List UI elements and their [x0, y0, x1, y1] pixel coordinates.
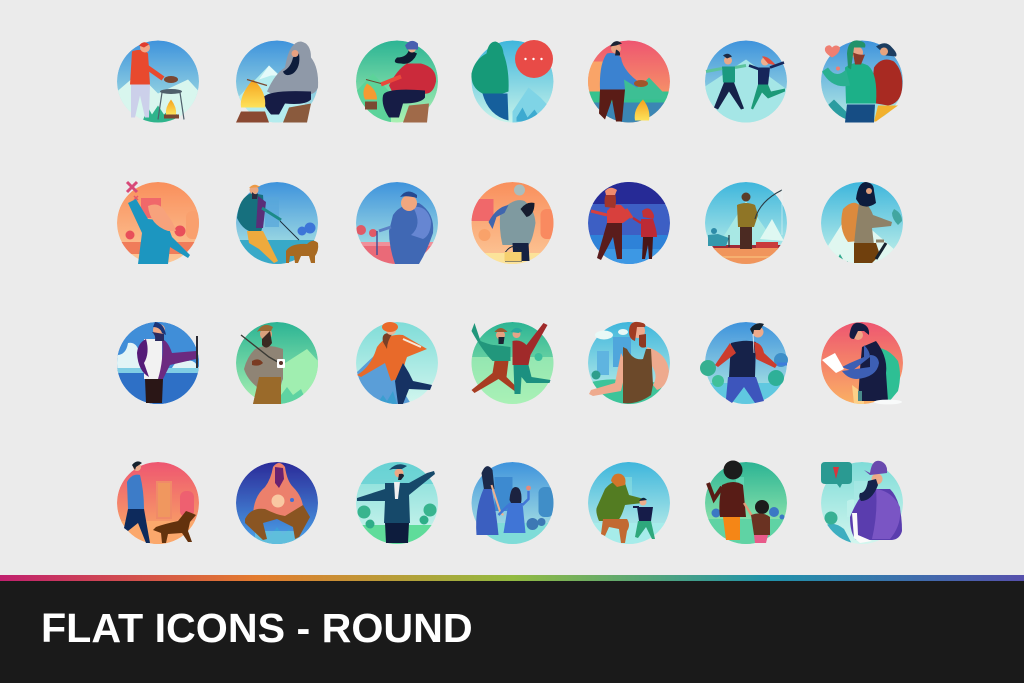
figure: small fisher — [708, 228, 729, 247]
background scene — [472, 182, 554, 265]
figure — [599, 41, 649, 122]
footer bar — [0, 581, 1024, 683]
background scene — [588, 40, 670, 122]
background scene — [705, 462, 787, 544]
icon: man walking dog at sunset — [117, 461, 199, 544]
trees — [358, 504, 436, 528]
icon: two friends dancing — [472, 322, 554, 404]
figure — [357, 464, 435, 543]
dog — [286, 241, 318, 263]
background scene — [705, 322, 787, 404]
heart bubbles — [825, 45, 840, 70]
figure — [363, 41, 436, 122]
figure — [245, 463, 310, 540]
figure — [471, 42, 509, 120]
figure: woman — [749, 56, 785, 110]
icon: man in grey hoodie by campfire — [236, 40, 318, 122]
icon: man in brown coat with mug — [236, 322, 318, 404]
background scene — [821, 462, 903, 544]
icon: old man with cane — [356, 182, 438, 264]
figure: girl — [498, 486, 531, 533]
figure: woman — [873, 43, 902, 121]
background scene — [236, 322, 318, 404]
figure: right friend — [510, 323, 550, 394]
figure: man — [706, 54, 746, 110]
figure — [589, 322, 669, 403]
icon: person in orange coat skating — [356, 322, 438, 404]
figure — [488, 184, 536, 261]
figure: child — [633, 208, 657, 259]
trees — [700, 353, 788, 387]
icon: bearded man in red coat by campfire — [356, 40, 438, 123]
figure — [124, 461, 150, 543]
figure — [377, 191, 433, 264]
icon: squatting man with long beard — [236, 462, 318, 544]
figure — [128, 199, 190, 264]
cross mark — [127, 182, 138, 200]
background scene — [356, 462, 438, 544]
figure — [850, 461, 902, 543]
speech bubble — [515, 40, 553, 78]
background scene — [588, 182, 670, 264]
icon: man and child holding hands — [588, 182, 670, 264]
background scene — [472, 40, 554, 122]
figure: main fisherman — [737, 190, 782, 249]
icon: person in green hoodie with speech bubble — [471, 40, 554, 122]
figure: adult — [708, 460, 754, 540]
bush — [526, 518, 546, 530]
background scene — [821, 322, 903, 404]
title: FLAT ICONS - ROUND — [41, 605, 473, 651]
figure — [357, 322, 432, 404]
icon: couple in warm clothes with heart — [821, 40, 903, 122]
background scene — [472, 322, 554, 404]
figure: man — [591, 188, 632, 260]
icon: bearded man in tank top — [588, 322, 670, 404]
rainbow stripe — [0, 575, 1024, 581]
figure: woman — [596, 474, 644, 543]
background scene — [117, 462, 199, 544]
icon: woman playing with child — [588, 462, 670, 544]
figure: woman — [476, 466, 504, 535]
icon: man in purple jacket at railing — [117, 322, 199, 404]
clouds — [595, 329, 628, 340]
background scene — [821, 182, 903, 264]
background scene — [236, 40, 318, 122]
icon: man in suit gesturing — [356, 462, 438, 544]
figure — [236, 42, 318, 122]
icon: dancing couple — [705, 40, 787, 122]
background scene — [588, 462, 670, 544]
figure — [137, 322, 198, 403]
background scene — [705, 40, 787, 122]
icon: man grilling — [117, 40, 199, 122]
icon: fisherman on boat — [705, 182, 787, 264]
figure: left friend — [472, 323, 520, 394]
figure — [715, 323, 787, 403]
background scene — [588, 322, 670, 404]
figure — [130, 42, 184, 120]
background scene — [117, 182, 200, 264]
figure: child — [751, 500, 770, 543]
background scene — [356, 322, 438, 404]
background scene — [356, 182, 438, 264]
figure — [822, 323, 902, 404]
icon: blue figure waving with crossed mark — [117, 182, 200, 264]
figure — [241, 325, 285, 404]
background scene — [821, 40, 903, 122]
background scene — [472, 462, 554, 544]
figure: man — [822, 40, 876, 122]
icon: adult and child from behind — [705, 460, 787, 544]
icon: person with black cat and bag — [472, 182, 554, 265]
figure: child — [633, 498, 655, 539]
icon: man in purple with location bubble — [821, 461, 903, 544]
background scene — [117, 322, 199, 404]
background scene — [356, 40, 438, 122]
icon grid — [117, 40, 903, 544]
icon: woman and girl with city view — [472, 462, 554, 544]
icon: man over fire with chicken — [588, 40, 670, 122]
icon: man walking brown dog — [236, 182, 318, 264]
speech bubble with pin — [821, 462, 852, 488]
background scene — [236, 462, 318, 544]
icon: man walking with earbuds — [700, 322, 788, 404]
background scene — [117, 40, 199, 122]
figure — [841, 182, 902, 263]
figure — [237, 185, 299, 263]
background scene — [236, 182, 318, 264]
dog — [153, 511, 196, 543]
icon: hiker with orange backpack — [821, 182, 903, 264]
icon: hiker reading map — [821, 322, 903, 404]
background scene — [705, 182, 787, 264]
